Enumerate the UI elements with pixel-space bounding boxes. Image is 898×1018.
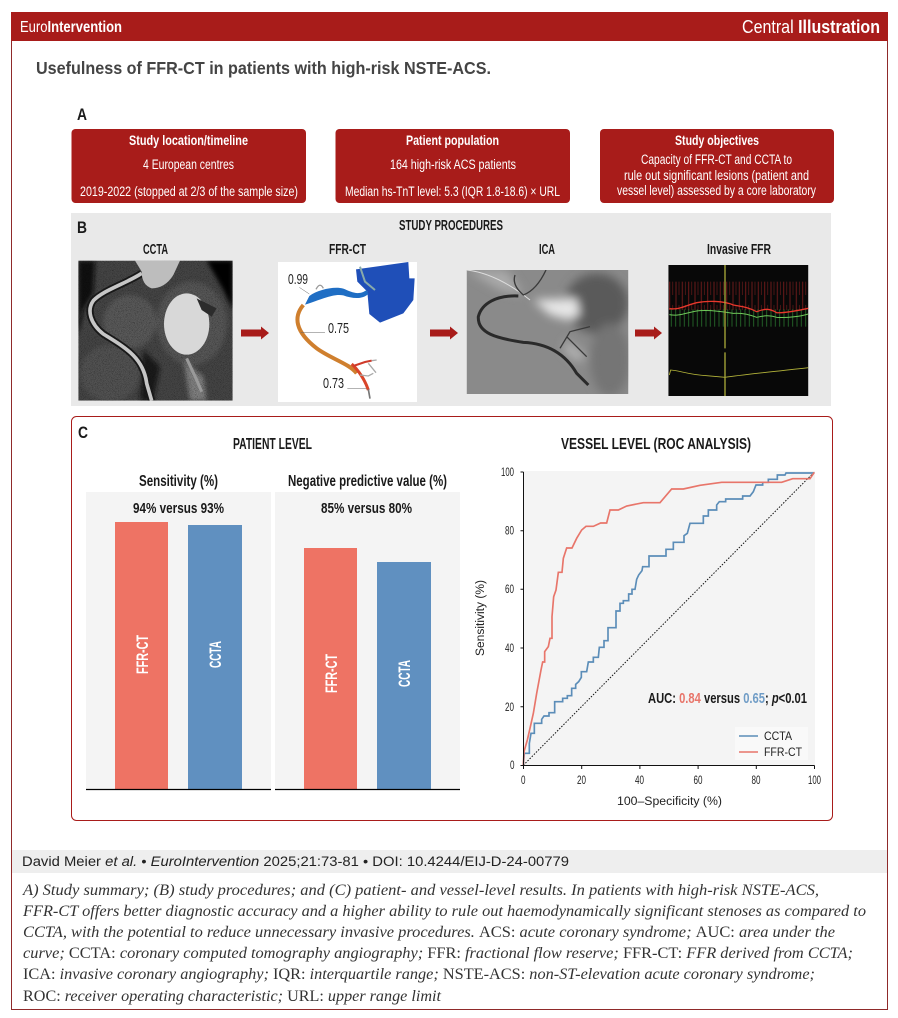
diagonal reference line	[523, 472, 814, 765]
x axis tick labels: 20	[577, 775, 586, 787]
panel: patient population: Patient population	[406, 132, 499, 148]
arrow: ICA to invasive FFR	[635, 326, 662, 340]
caption: FFR-CT offers better diagnostic accuracy and a higher ability to rule out haemodynamically significant stenoses as compared to	[22, 903, 866, 920]
y axis tick labels: 20	[505, 702, 514, 714]
panel: study location/timeline	[72, 129, 306, 203]
y axis tick labels: 80	[505, 526, 514, 538]
legend	[735, 727, 808, 760]
study procedures heading: STUDY PROCEDURES	[399, 218, 503, 234]
CCTA scan image	[78, 261, 233, 402]
panel: patient population	[336, 129, 570, 203]
bar: FFR-CT sensitivity	[115, 522, 168, 789]
title: Usefulness of FFR-CT in patients with high-risk NSTE-ACS.	[36, 58, 491, 78]
CCTA heading: CCTA	[143, 242, 168, 258]
vessel level heading: VESSEL LEVEL (ROC ANALYSIS)	[561, 436, 751, 453]
ICA heading: ICA	[539, 242, 555, 258]
bar chart: sensitivity: Sensitivity (%)	[139, 473, 218, 490]
bar: CCTA NPV	[377, 562, 431, 789]
legend: FFR-CT	[764, 747, 802, 759]
invasive FFR pressure tracing	[668, 265, 808, 396]
caption: ICA: invasive coronary angiography; IQR: interquartile range; NSTE-ACS: non-ST-elevation acute coronary syndrome;	[23, 966, 815, 983]
arrow: CCTA to FFR-CT	[241, 326, 269, 340]
bar: FFR-CT NPV	[304, 548, 357, 789]
caption: A) Study summary; (B) study procedures; and (C) patient- and vessel-level results. In patients with high-risk NSTE-ACS,	[22, 882, 819, 899]
caption	[22, 882, 866, 1005]
y axis tick labels: 40	[505, 643, 514, 655]
FFR-CT curve	[523, 472, 814, 765]
section A label: A	[77, 105, 87, 124]
CCTA curve	[523, 473, 814, 765]
FFR-CT vessel model	[278, 262, 417, 402]
x axis tick labels: 0	[521, 775, 526, 787]
bar chart: sensitivity: 94% versus 93%	[133, 500, 224, 517]
value 0.73: 0.73	[323, 375, 344, 392]
panel: study objectives: Study objectives	[675, 132, 759, 148]
panel: study procedures	[71, 213, 831, 406]
panel: study objectives	[600, 129, 834, 203]
section C label: C	[78, 423, 88, 442]
panel: patient population: Median hs-TnT level: 5.3 (IQR 1.8-18.6) × URL	[345, 184, 560, 199]
invasive FFR heading: Invasive FFR	[707, 242, 771, 258]
caption: ROC: receiver operating characteristic; URL: upper range limit	[23, 988, 442, 1005]
citation bar: David Meier et al. • EuroIntervention 2025;21:73-81 • DOI: 10.4244/EIJ-D-24-00779	[22, 854, 569, 869]
bar chart: negative predictive value	[275, 473, 460, 790]
axes	[520, 472, 814, 769]
panel: study objectives: rule out significant lesions (patient and	[624, 168, 809, 183]
header band	[11, 12, 888, 41]
x axis tick labels	[521, 775, 821, 787]
ICA angiogram image	[467, 270, 630, 397]
x axis tick labels: 80	[752, 775, 760, 787]
caption: curve; CCTA: coronary computed tomography angiography; FFR: fractional flow reserve; FFR-CT: FFR derived from CCTA;	[23, 945, 853, 962]
central illustration tag: Central Illustration	[742, 16, 880, 37]
panel: study location/timeline: Study location/timeline	[129, 132, 248, 148]
bar: FFR-CT NPV: FFR-CT	[322, 654, 341, 693]
x axis tick labels: 60	[694, 775, 702, 787]
x axis tick labels: 40	[635, 775, 644, 787]
bar chart: negative predictive value: 85% versus 80%	[321, 500, 412, 517]
value 0.99: 0.99	[288, 271, 308, 288]
value 0.75: 0.75	[328, 320, 349, 337]
y axis tick labels: 0	[510, 760, 514, 772]
legend: CCTA	[764, 731, 792, 743]
bar: FFR-CT sensitivity: FFR-CT	[133, 635, 152, 674]
FFR-CT heading: FFR-CT	[329, 242, 366, 258]
y axis tick labels: 60	[505, 584, 514, 596]
y axis title: Sensitivity (%)	[475, 580, 487, 656]
bar chart: sensitivity	[86, 473, 271, 790]
panel: results	[72, 416, 832, 820]
bar: CCTA sensitivity	[188, 525, 242, 789]
y axis tick labels	[501, 467, 514, 772]
patient level heading: PATIENT LEVEL	[233, 436, 312, 453]
panel: study location/timeline: 2019-2022 (stopped at 2/3 of the sample size)	[80, 184, 298, 199]
y axis tick labels: 100	[501, 467, 514, 479]
journal name: EuroIntervention	[20, 19, 122, 36]
bar: CCTA NPV: CCTA	[395, 660, 414, 687]
citation bar	[12, 850, 887, 873]
section B label: B	[77, 218, 87, 237]
x axis title: 100–Specificity (%)	[617, 796, 722, 808]
ROC chart	[475, 467, 821, 808]
panel: patient population: 164 high-risk ACS patients	[390, 157, 516, 172]
arrow: FFR-CT to ICA	[430, 326, 458, 340]
x axis tick labels: 100	[808, 775, 821, 787]
bar: CCTA sensitivity: CCTA	[206, 641, 225, 668]
bar chart: negative predictive value: Negative predictive value (%)	[288, 473, 447, 490]
panel: study location/timeline: 4 European centres	[143, 157, 234, 172]
panel: study objectives: Capacity of FFR-CT and CCTA to	[641, 152, 792, 167]
panel: study objectives: vessel level) assessed by a core laboratory	[617, 183, 816, 198]
AUC annotation: AUC: 0.84 versus 0.65; p<0.01	[648, 690, 807, 707]
caption: CCTA, with the potential to reduce unnecessary invasive procedures. ACS: acute coronary syndrome; AUC: area under the	[23, 924, 835, 941]
